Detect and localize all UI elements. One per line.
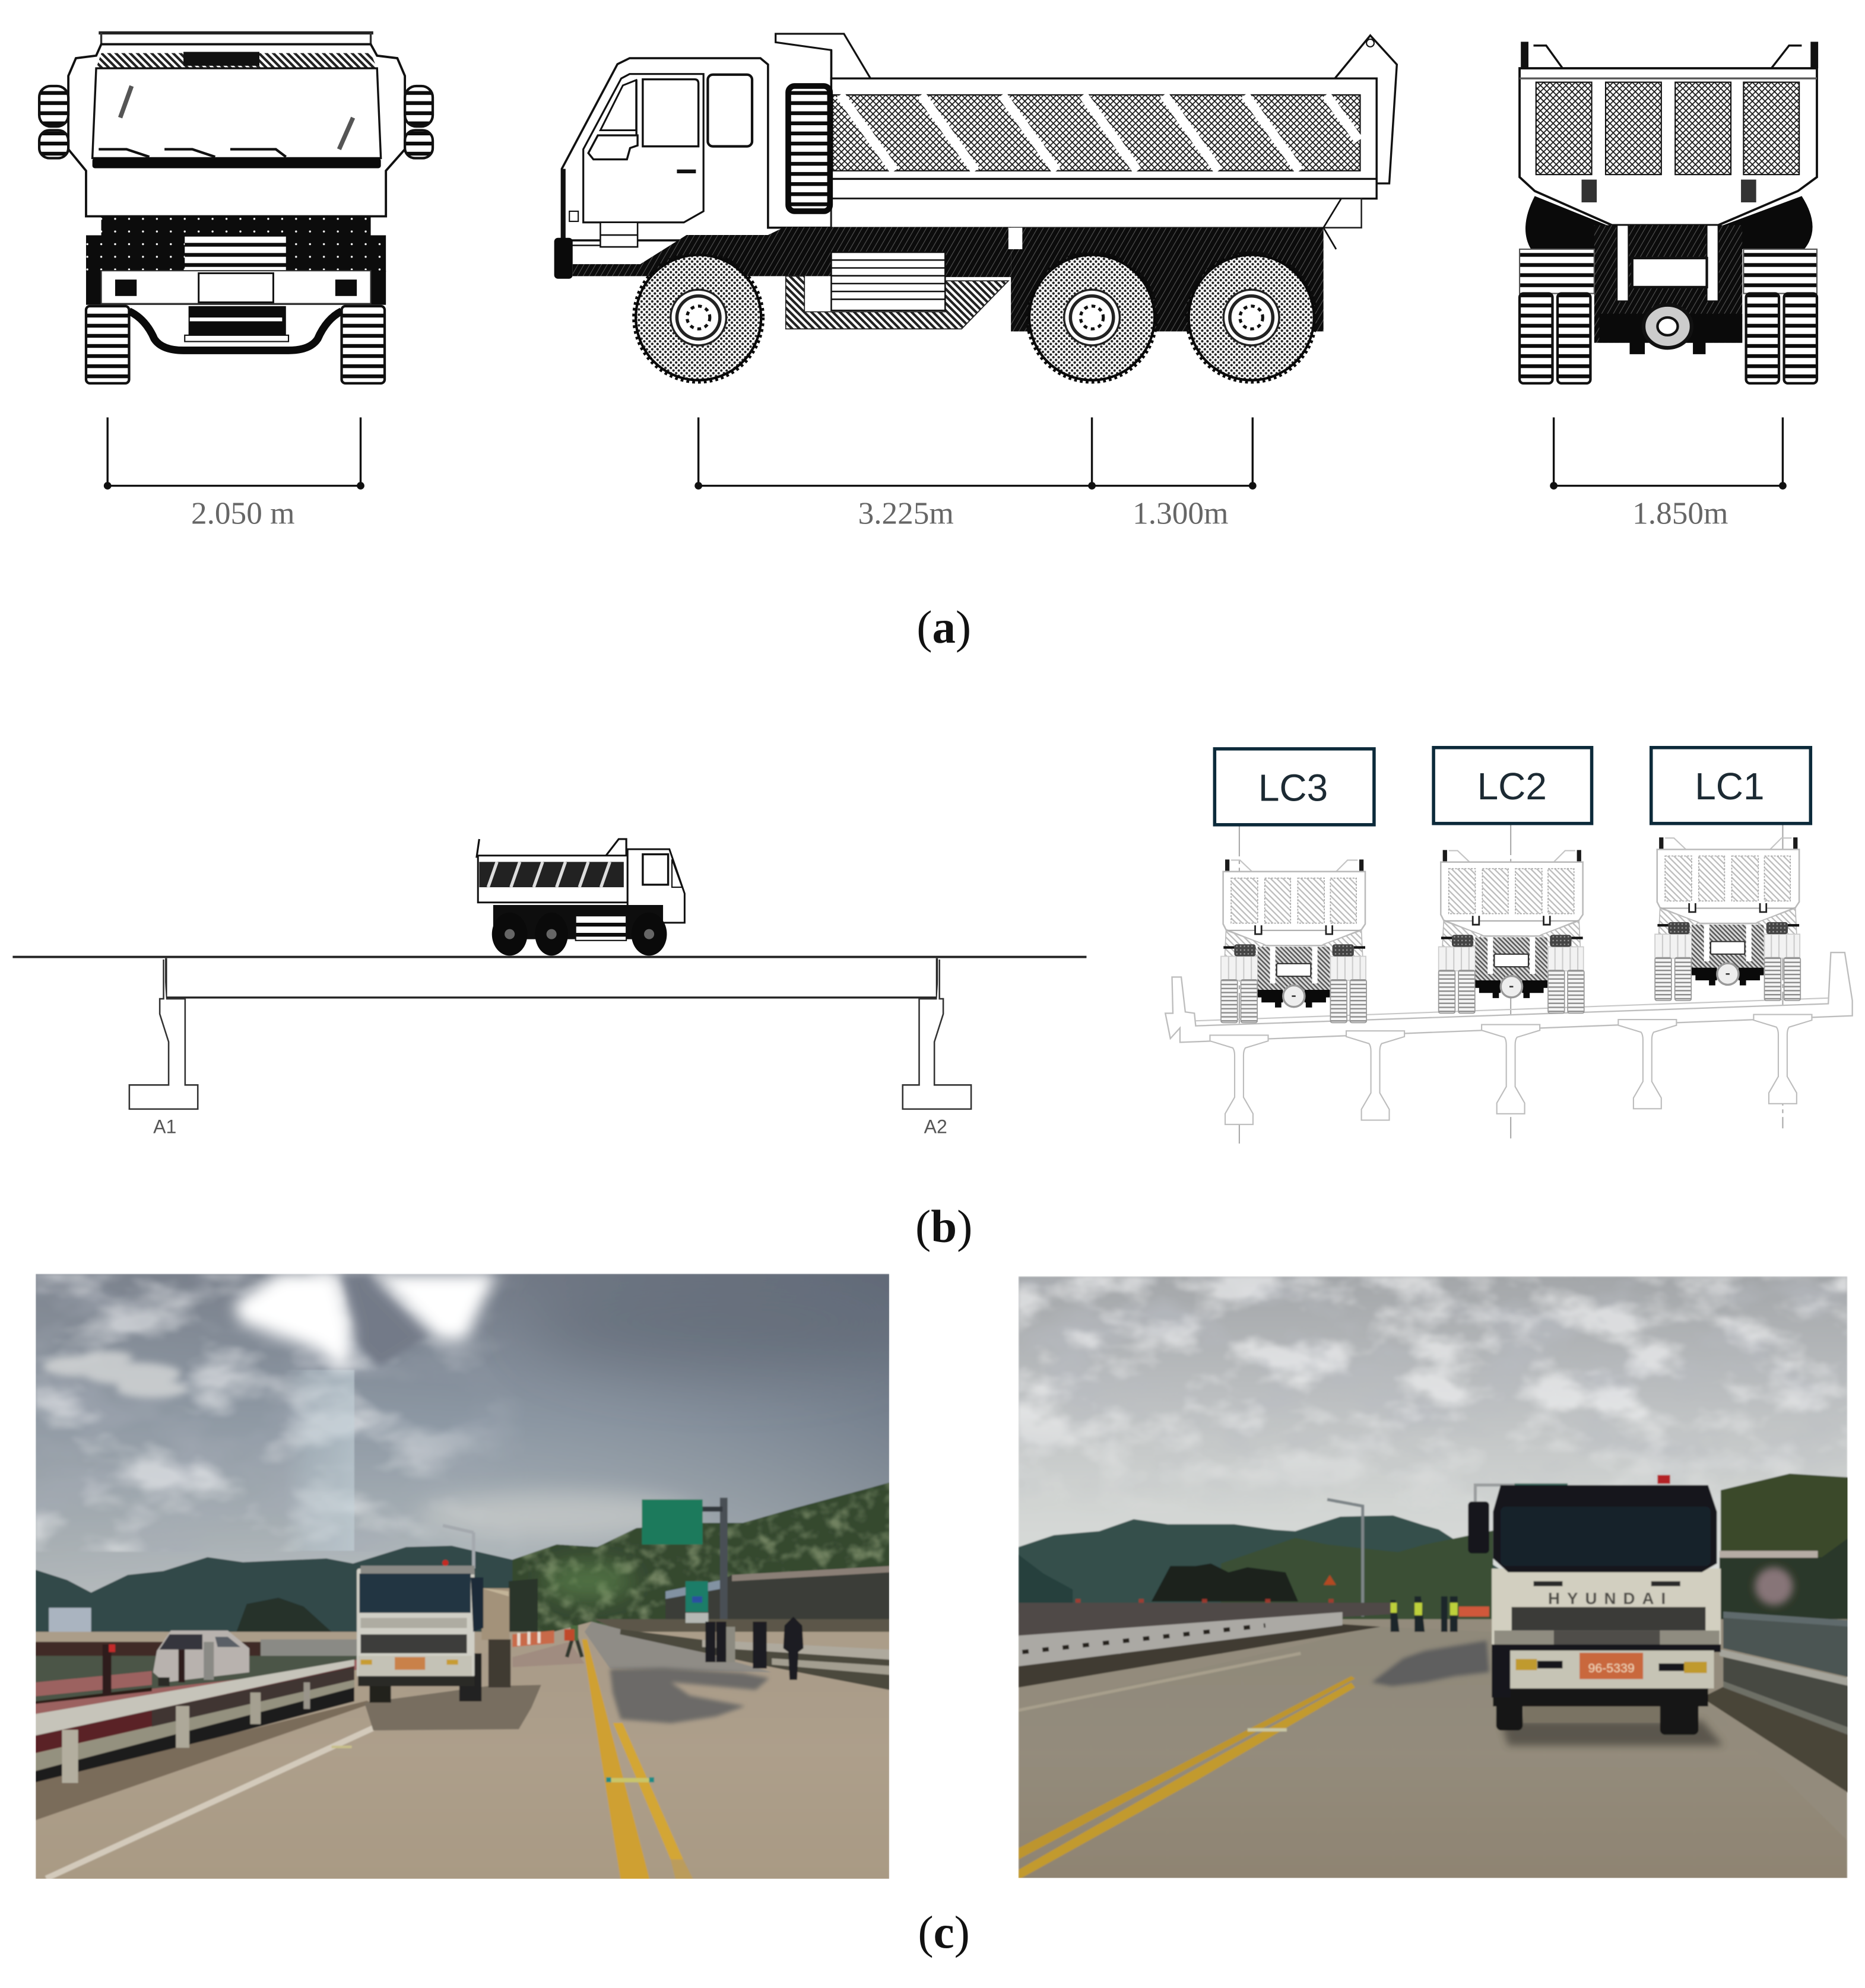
small truck on bridge — [477, 839, 684, 955]
road — [36, 1622, 890, 1880]
panel a: truck dimension drawings — [39, 33, 1817, 531]
photo: truck on bridge, rear approach — [36, 1271, 911, 1880]
right rail and people — [512, 1617, 890, 1690]
sky — [36, 1271, 911, 1603]
truck rear view — [1520, 42, 1817, 383]
chassis — [573, 227, 1011, 277]
car — [153, 1631, 249, 1686]
cab door and windows — [562, 74, 752, 247]
wheels — [634, 253, 1316, 382]
photo: truck on bridge, front view — [1019, 1276, 1850, 1880]
truck: HYUNDAI — [1548, 1589, 1666, 1608]
dimension 1.850 m — [1550, 417, 1787, 531]
panel b right: load cases cross section — [1165, 748, 1853, 1144]
abutment A1: A1 — [153, 1116, 176, 1137]
dimension 3.225 m and 1.300 m — [694, 417, 1257, 531]
abutment A1 — [129, 960, 198, 1137]
caption a: (a) — [916, 602, 971, 653]
truck at LC2 — [1439, 850, 1584, 1013]
dimension 2.050 m — [104, 417, 364, 531]
dimension 1.850 m: 1.850m — [1632, 496, 1728, 531]
caption c: (c) — [918, 1907, 970, 1959]
right guard rail — [1702, 1612, 1850, 1794]
dimension 3.225 m and 1.300 m: 1.300m — [1133, 496, 1228, 531]
dimension 2.050 m: 2.050 m — [191, 496, 295, 531]
bridge cross section — [1165, 952, 1853, 1125]
mountains — [1019, 1473, 1850, 1632]
truck at LC3 — [1221, 859, 1366, 1022]
center lines — [1239, 825, 1782, 1144]
abutment A2 — [903, 960, 971, 1137]
left guard rails — [1019, 1599, 1392, 1688]
dimension 3.225 m and 1.300 m: 3.225m — [858, 496, 954, 531]
box LC2 — [1433, 748, 1592, 824]
abutment A2: A2 — [924, 1116, 947, 1137]
truck — [1468, 1475, 1723, 1746]
box LC2: LC2 — [1477, 765, 1547, 808]
caption b: (b) — [915, 1201, 972, 1253]
road line and girder — [12, 957, 1086, 998]
box LC1 — [1651, 748, 1810, 824]
building and signs — [443, 1497, 889, 1632]
truck side view — [554, 34, 1397, 382]
truck: 96-5339 — [1588, 1661, 1635, 1675]
truck front view — [39, 33, 433, 383]
truck at LC1 — [1655, 837, 1800, 1001]
panel b left: bridge elevation — [12, 839, 1086, 1137]
mountains — [36, 1482, 889, 1633]
box LC3 — [1214, 749, 1374, 825]
workers and roadside — [1324, 1575, 1489, 1632]
box LC1: LC1 — [1695, 765, 1765, 808]
box LC3: LC3 — [1258, 766, 1328, 809]
road — [1019, 1619, 1847, 1880]
truck — [357, 1560, 541, 1730]
sky — [1019, 1276, 1847, 1580]
left guard rail and deck — [36, 1640, 372, 1820]
